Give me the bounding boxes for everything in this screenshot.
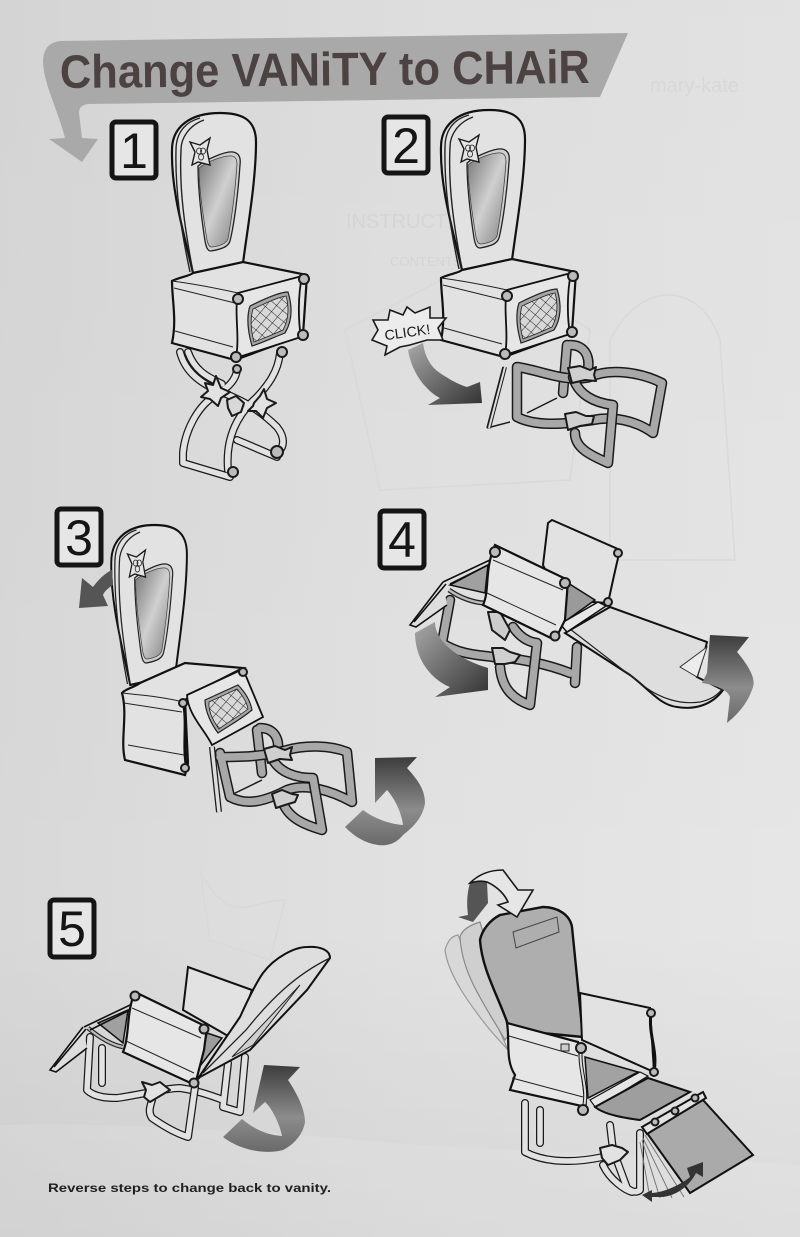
arrow: back tilts left bbox=[79, 570, 113, 608]
step 4 number bbox=[380, 511, 424, 568]
step 3 number bbox=[57, 509, 101, 566]
step 2 number: 2 bbox=[392, 118, 420, 174]
final step: chair fully opened illustration bbox=[445, 907, 753, 1198]
callout: click bbox=[372, 307, 446, 355]
step 1 number bbox=[112, 122, 156, 179]
step 4: chair with extended leg rest illustration bbox=[410, 520, 723, 708]
step 3: front panel opening illustration bbox=[111, 525, 352, 830]
step 5 number: 5 bbox=[58, 901, 86, 957]
step 1: vanity illustration bbox=[172, 113, 309, 477]
title banner bbox=[43, 33, 628, 162]
arrow: panel lifts up bbox=[345, 757, 425, 845]
step 2 number bbox=[384, 117, 428, 174]
faint show-through from reverse side: CONTENTS bbox=[390, 254, 462, 269]
step 3 number: 3 bbox=[65, 510, 93, 566]
arrow: seat back rotates bbox=[458, 870, 533, 922]
arrow: side panel swings down bbox=[415, 622, 488, 697]
step 1 number: 1 bbox=[120, 123, 148, 179]
footnote: Reverse steps to change back to vanity. bbox=[48, 1183, 331, 1195]
step 5 number bbox=[50, 900, 94, 957]
step 5: lifting seat back illustration bbox=[50, 947, 330, 1137]
callout: click: CLICK! bbox=[383, 321, 431, 343]
arrow: leg rest lifts bbox=[702, 635, 754, 723]
arrow: leg rest double headed bbox=[642, 1162, 703, 1202]
faint show-through from reverse side bbox=[200, 75, 739, 960]
faint show-through from reverse side: INSTRUCTIONS bbox=[346, 211, 496, 233]
arrow: seat back up bbox=[223, 1065, 305, 1152]
step 4 number: 4 bbox=[388, 512, 416, 568]
arrow: click down bbox=[408, 343, 482, 405]
step 2: legs unfolding illustration bbox=[441, 110, 662, 463]
faint show-through from reverse side: mary-kate bbox=[650, 75, 739, 97]
title banner: Change VANiTY to CHAiR bbox=[60, 40, 590, 98]
